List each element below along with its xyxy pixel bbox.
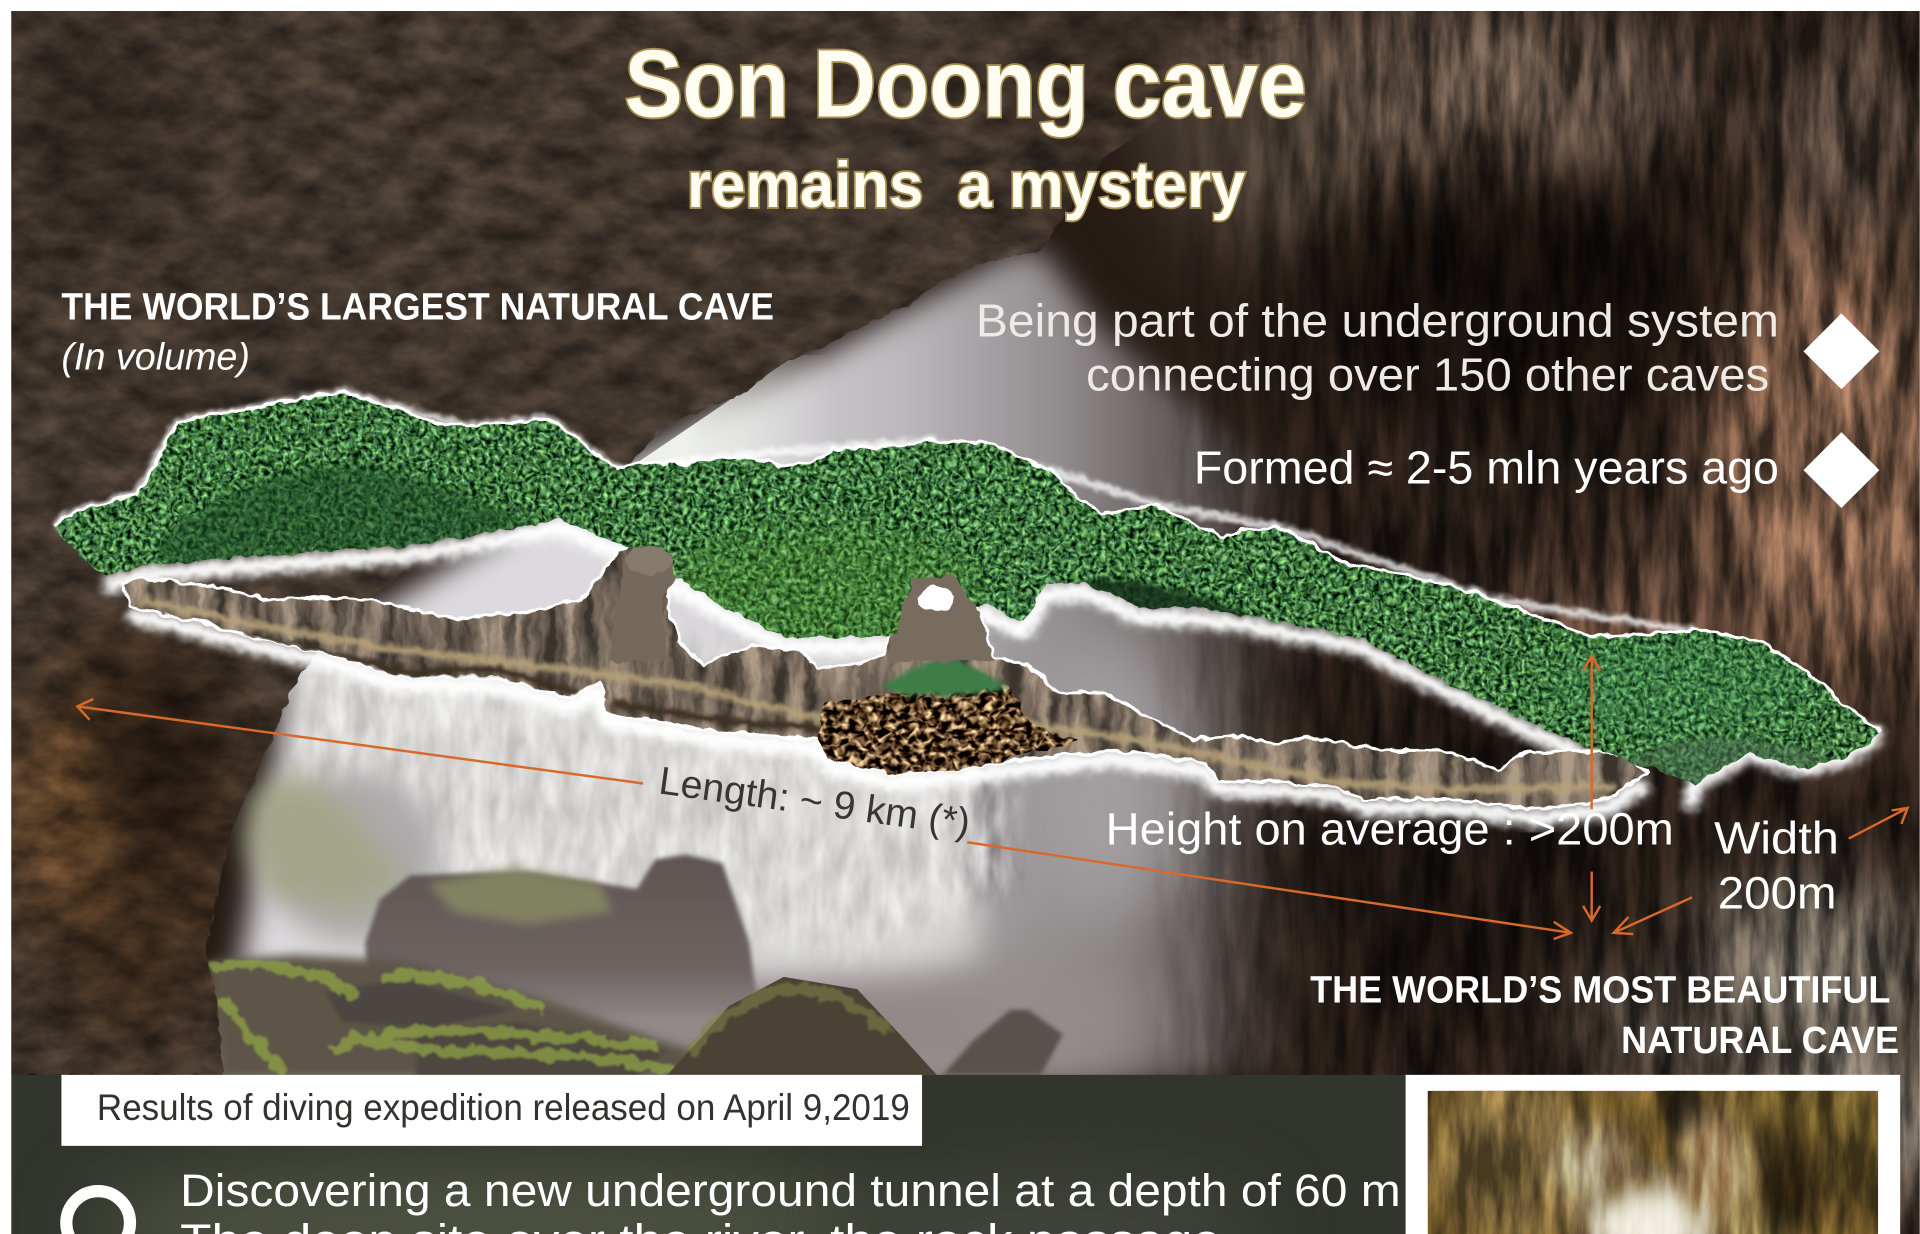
cave cross-section illustration (55, 392, 1879, 820)
arrows: width (1614, 808, 1908, 934)
heading: largest natural cave: THE WORLD’S LARGEST NATURAL CAVE (61, 287, 774, 329)
label: length: Length: ~ 9 km (*) (656, 760, 973, 845)
panel: diving expedition results (0, 1075, 1408, 1234)
lower cave passage (123, 539, 1653, 820)
cave interior photo (1428, 1090, 1878, 1234)
subtitle: remains a mystery (687, 148, 1245, 221)
icon: diamond bullet (1803, 313, 1879, 389)
arrow: height up and down (1583, 656, 1600, 921)
label: width: Width (1714, 812, 1839, 863)
arrow: length left (77, 699, 643, 783)
panel: framed cave photo (1406, 1071, 1900, 1234)
mossy boulders (208, 769, 1063, 1077)
text: discovery (180, 1165, 1401, 1234)
text: formed age fact: Formed ≈ 2-5 mln years ago (1194, 442, 1779, 494)
text: underground system fact: connecting over 150 other caves (1086, 349, 1769, 401)
white glow around cave (55, 392, 1879, 819)
heading: largest natural cave: (In volume) (61, 337, 250, 379)
label: width (1714, 812, 1839, 918)
heading: most beautiful natural cave: THE WORLD’S MOST BEAUTIFUL (1310, 970, 1890, 1012)
rock pile (818, 686, 1078, 775)
heading: most beautiful natural cave: NATURAL CAVE (1621, 1020, 1899, 1062)
title: Son Doong cave (625, 31, 1306, 137)
label: height: Height on average : >200m (1106, 804, 1674, 855)
vegetation on rock pile (879, 655, 1010, 695)
text: discovery: Discovering a new underground tunnel at a depth of 60 m (180, 1165, 1401, 1216)
upper and left rock wall (11, 11, 1232, 1075)
icon: diamond bullet (1803, 432, 1879, 508)
label box: results date: Results of diving expedition released on April 9,2019 (97, 1087, 910, 1128)
text: underground system fact (976, 295, 1779, 401)
heading: most beautiful natural cave (1310, 970, 1899, 1062)
label: width: 200m (1718, 867, 1837, 918)
heading: largest natural cave (61, 287, 774, 379)
icon: ring bullet (66, 1191, 130, 1234)
cave opening light (221, 251, 1347, 1077)
label box: results date (61, 1075, 922, 1146)
green surface jungle (55, 392, 1879, 796)
title (625, 31, 1306, 221)
text: underground system fact: Being part of the underground system (976, 295, 1779, 347)
arrow: length right (967, 842, 1571, 939)
karst pillars (609, 545, 994, 661)
